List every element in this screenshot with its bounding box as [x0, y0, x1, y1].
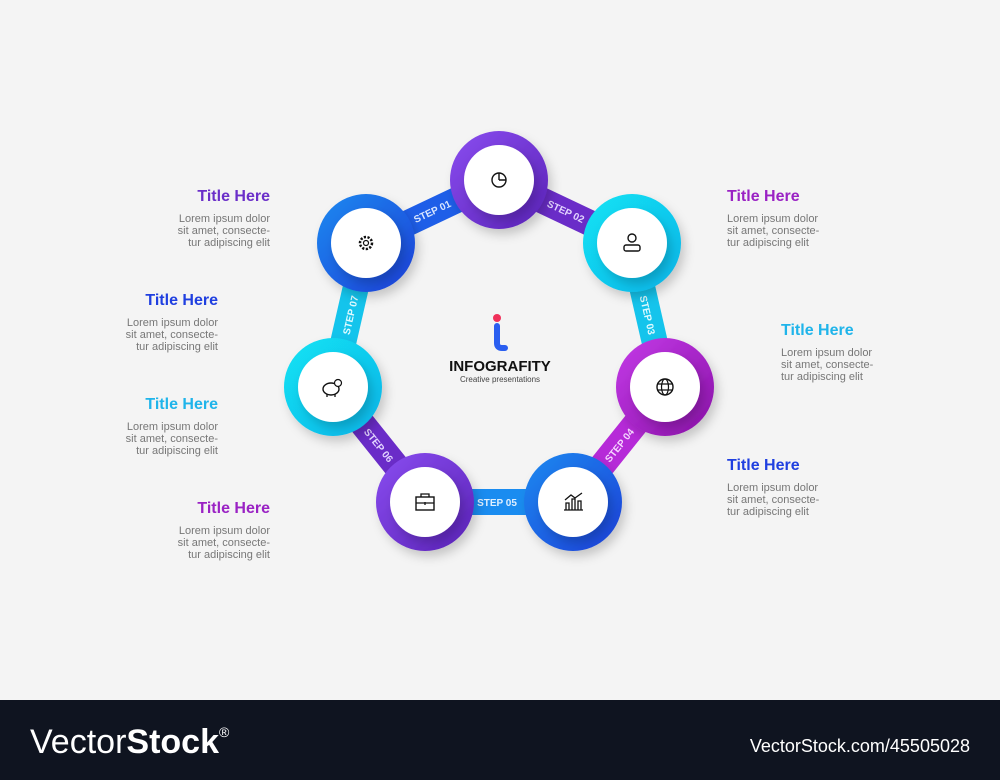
text block: right 2: sit amet, consecte- [781, 359, 874, 371]
text block: right 3: sit amet, consecte- [727, 494, 820, 506]
center logo: INFOGRAFITY [449, 358, 551, 375]
text block: right 1: Lorem ipsum dolor [727, 213, 818, 225]
node 1: pie chart icon [450, 131, 548, 229]
node 2: user icon [583, 194, 681, 292]
text block: right 1: tur adipiscing elit [727, 237, 809, 249]
footer bar: VectorStock.com/45505028 [750, 736, 970, 756]
text block: left 4: Lorem ipsum dolor [179, 525, 270, 537]
connector: step 02 [499, 180, 632, 243]
center logo: Creative presentations [460, 375, 540, 384]
text block: left 4: Title Here [197, 500, 270, 517]
text block: right 2 [781, 322, 874, 383]
text block: left 4: tur adipiscing elit [188, 549, 270, 561]
node 7: gear icon [317, 194, 415, 292]
center logo [449, 314, 551, 384]
connector: step 04: STEP 04 [603, 427, 637, 465]
text block: right 1: Title Here [727, 188, 800, 205]
text block: left 3: tur adipiscing elit [136, 445, 218, 457]
text block: right 1: sit amet, consecte- [727, 225, 820, 237]
connector: step 03: STEP 03 [637, 295, 656, 336]
text block: left 1 [178, 188, 270, 249]
footer bar [0, 700, 1000, 780]
text block: right 3: tur adipiscing elit [727, 506, 809, 518]
node 6: piggy bank icon [284, 338, 382, 436]
text block: right 2: Lorem ipsum dolor [781, 347, 872, 359]
connector: step 02: STEP 02 [545, 199, 586, 226]
text block: left 1: Lorem ipsum dolor [179, 213, 270, 225]
connector: step 07 [333, 243, 366, 387]
text block: left 2 [126, 292, 218, 353]
connector: step 01: STEP 01 [412, 199, 453, 226]
text block: left 2: Lorem ipsum dolor [127, 317, 218, 329]
text block: left 4: sit amet, consecte- [178, 537, 270, 549]
text block: left 2: tur adipiscing elit [136, 341, 218, 353]
text block: right 2: Title Here [781, 322, 854, 339]
text block: left 1: tur adipiscing elit [188, 237, 270, 249]
text block: left 3: Lorem ipsum dolor [127, 421, 218, 433]
connector: step 03 [632, 243, 665, 387]
footer bar: ® [219, 724, 230, 740]
text block: left 1: Title Here [197, 188, 270, 205]
footer bar: VectorStock [30, 723, 219, 761]
text block: right 3: Lorem ipsum dolor [727, 482, 818, 494]
node 4: chart icon [524, 453, 622, 551]
text block: right 3: Title Here [727, 457, 800, 474]
text block: left 1: sit amet, consecte- [178, 225, 270, 237]
connector: step 07: STEP 07 [342, 294, 361, 336]
text block: right 3 [727, 457, 820, 518]
text block: right 2: tur adipiscing elit [781, 371, 863, 383]
text block: left 2: Title Here [145, 292, 218, 309]
text block: right 1 [727, 188, 820, 249]
connector: step 05: STEP 05 [477, 498, 517, 509]
text block: left 3: sit amet, consecte- [126, 433, 218, 445]
text block: left 4 [178, 500, 270, 561]
text block: left 2: sit amet, consecte- [126, 329, 218, 341]
text block: left 3: Title Here [145, 396, 218, 413]
node 5: briefcase icon [376, 453, 474, 551]
text block: left 3 [126, 396, 218, 457]
connector: step 06: STEP 06 [361, 427, 395, 465]
node 3: globe icon [616, 338, 714, 436]
connector: step 04 [573, 387, 665, 502]
connector: step 06 [333, 387, 425, 502]
connector: step 01 [366, 180, 499, 243]
